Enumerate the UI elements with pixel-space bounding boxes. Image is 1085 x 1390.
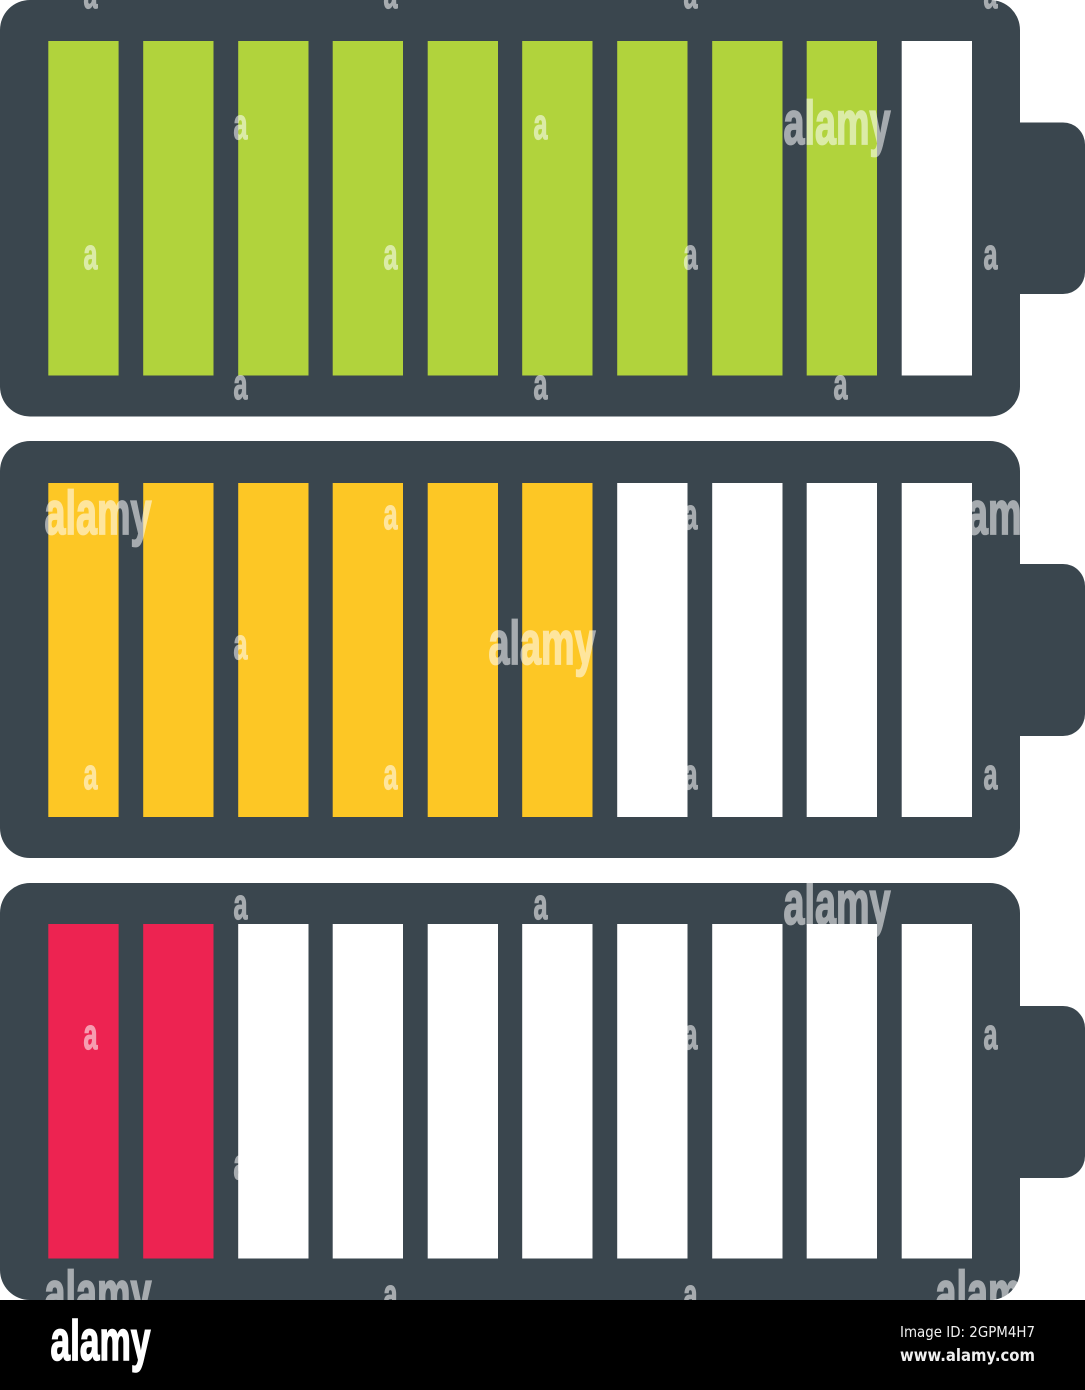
battery: medium charge, 6 of 10 yellow [0,441,1085,858]
watermark overlay: a [684,490,698,539]
watermark overlay: a [84,750,98,799]
watermark overlay: a [234,620,248,669]
watermark overlay: alamy [44,479,152,547]
watermark overlay: a [534,880,548,929]
watermark overlay: a [984,1010,998,1059]
watermark overlay: a [234,880,248,929]
battery 3 casing [0,883,1085,1300]
watermark overlay: alamy [44,1259,152,1327]
battery 2 casing [0,441,1085,858]
watermark overlay: a [534,360,548,409]
watermark overlay: a [384,750,398,799]
watermark overlay: a [684,750,698,799]
watermark overlay: a [384,230,398,279]
watermark overlay: a [84,1010,98,1059]
battery 1 casing [0,0,1085,416]
battery: low charge, 2 of 10 red [0,883,1085,1300]
watermark overlay: alamy [488,609,596,677]
image id: Image ID: 2GPM4H7 [900,1323,1035,1341]
watermark overlay: a [684,1270,698,1319]
footer logo: alamy [50,1309,151,1373]
watermark overlay: a [984,750,998,799]
watermark overlay: a [234,100,248,149]
watermark overlay: a [984,230,998,279]
watermark overlay: a [534,100,548,149]
watermark overlay: a [384,1270,398,1319]
battery: high charge, 9 of 10 green [0,0,1085,416]
watermark overlay: a [684,1010,698,1059]
watermark overlay: alamy [784,869,891,937]
battery 2 cells [48,483,972,817]
watermark overlay: a [834,360,848,409]
footer band [0,1300,1085,1390]
website: www.alamy.com [900,1346,1035,1365]
watermark overlay: a [234,1140,248,1189]
watermark overlay: a [384,490,398,539]
battery 1 cells [48,41,972,376]
watermark overlay: a [684,230,698,279]
watermark overlay: a [84,230,98,279]
watermark overlay: alamy [784,89,891,157]
battery 3 cells [48,924,972,1258]
watermark overlay: a [234,360,248,409]
